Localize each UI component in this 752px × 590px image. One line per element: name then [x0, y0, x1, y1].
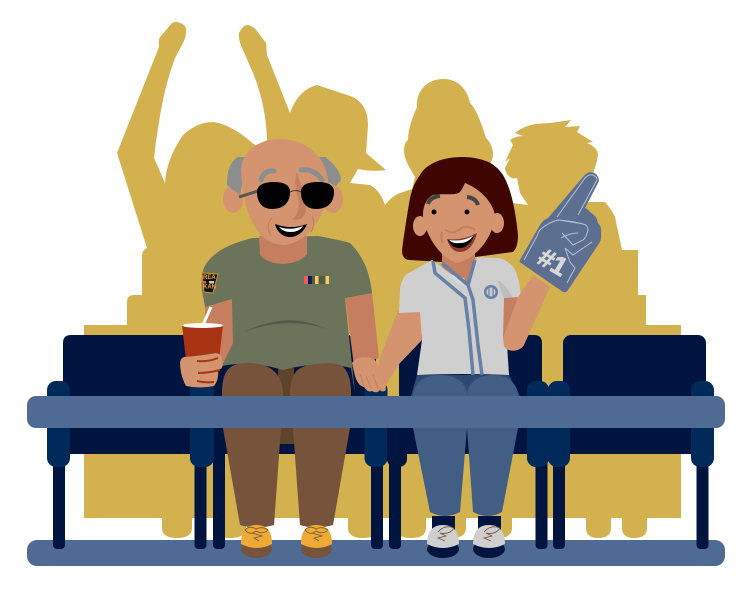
nose shadow [292, 172, 306, 220]
belly crease [244, 320, 327, 332]
woman's hair [402, 157, 518, 262]
armrests [47, 381, 714, 467]
man's mouth [275, 224, 307, 237]
smile lines [268, 216, 314, 236]
man's right upper arm [205, 297, 234, 372]
sleeve fold [497, 280, 513, 298]
woman's eyebrows [428, 196, 478, 205]
bottom rail [27, 540, 725, 566]
woman's forearm [503, 275, 550, 351]
medal ribbons [304, 276, 329, 284]
woman's socks [432, 516, 501, 530]
woman's face [423, 183, 495, 263]
holding hands [352, 357, 386, 392]
foam finger number: #1 [533, 242, 573, 282]
seat backs [63, 335, 706, 454]
side hair [227, 157, 341, 195]
woman's mouth [447, 233, 477, 252]
woman's arm to hand [376, 311, 422, 390]
woman's eyes [432, 210, 470, 214]
man's left shoe [241, 525, 272, 558]
woman's neck [442, 252, 475, 285]
sunglasses [239, 182, 334, 209]
gold gap between seats [376, 330, 399, 400]
veteran shoulder patch [202, 273, 218, 293]
middle armrest dark [387, 410, 407, 467]
woman's right shoe [473, 525, 505, 558]
man's neck [259, 236, 307, 264]
man's ears [223, 185, 343, 213]
woman's seat shadow [411, 375, 520, 396]
woman's ears [413, 213, 504, 236]
man's olive shirt [201, 236, 372, 393]
front rail [27, 396, 725, 428]
foam finger [520, 172, 601, 292]
gold crowd silhouette [84, 22, 681, 538]
collar notch [445, 273, 468, 288]
man's right shoe [301, 525, 332, 558]
veteran shoulder patch: KAN [203, 284, 216, 290]
man's hand holding cup [180, 353, 223, 388]
man's lower legs and pants [222, 363, 351, 528]
silhouette feet [162, 510, 647, 538]
red drink cup [182, 307, 223, 360]
woman's legs [413, 375, 518, 516]
woman's baseball jersey [399, 257, 521, 375]
woman's left shoe [427, 525, 459, 558]
jersey stripes [433, 260, 482, 375]
veteran man [180, 139, 379, 558]
man's left arm [345, 292, 379, 366]
woman's upper arm [503, 297, 520, 340]
jersey logo [484, 285, 498, 299]
eyebrows [261, 170, 322, 180]
woman [352, 157, 601, 558]
man's head [241, 139, 328, 245]
nose and cheek lines [441, 227, 475, 243]
right seat back [563, 335, 706, 454]
veteran shoulder patch: REA [203, 275, 216, 281]
thigh overlap [222, 363, 351, 395]
seat legs [53, 430, 708, 549]
